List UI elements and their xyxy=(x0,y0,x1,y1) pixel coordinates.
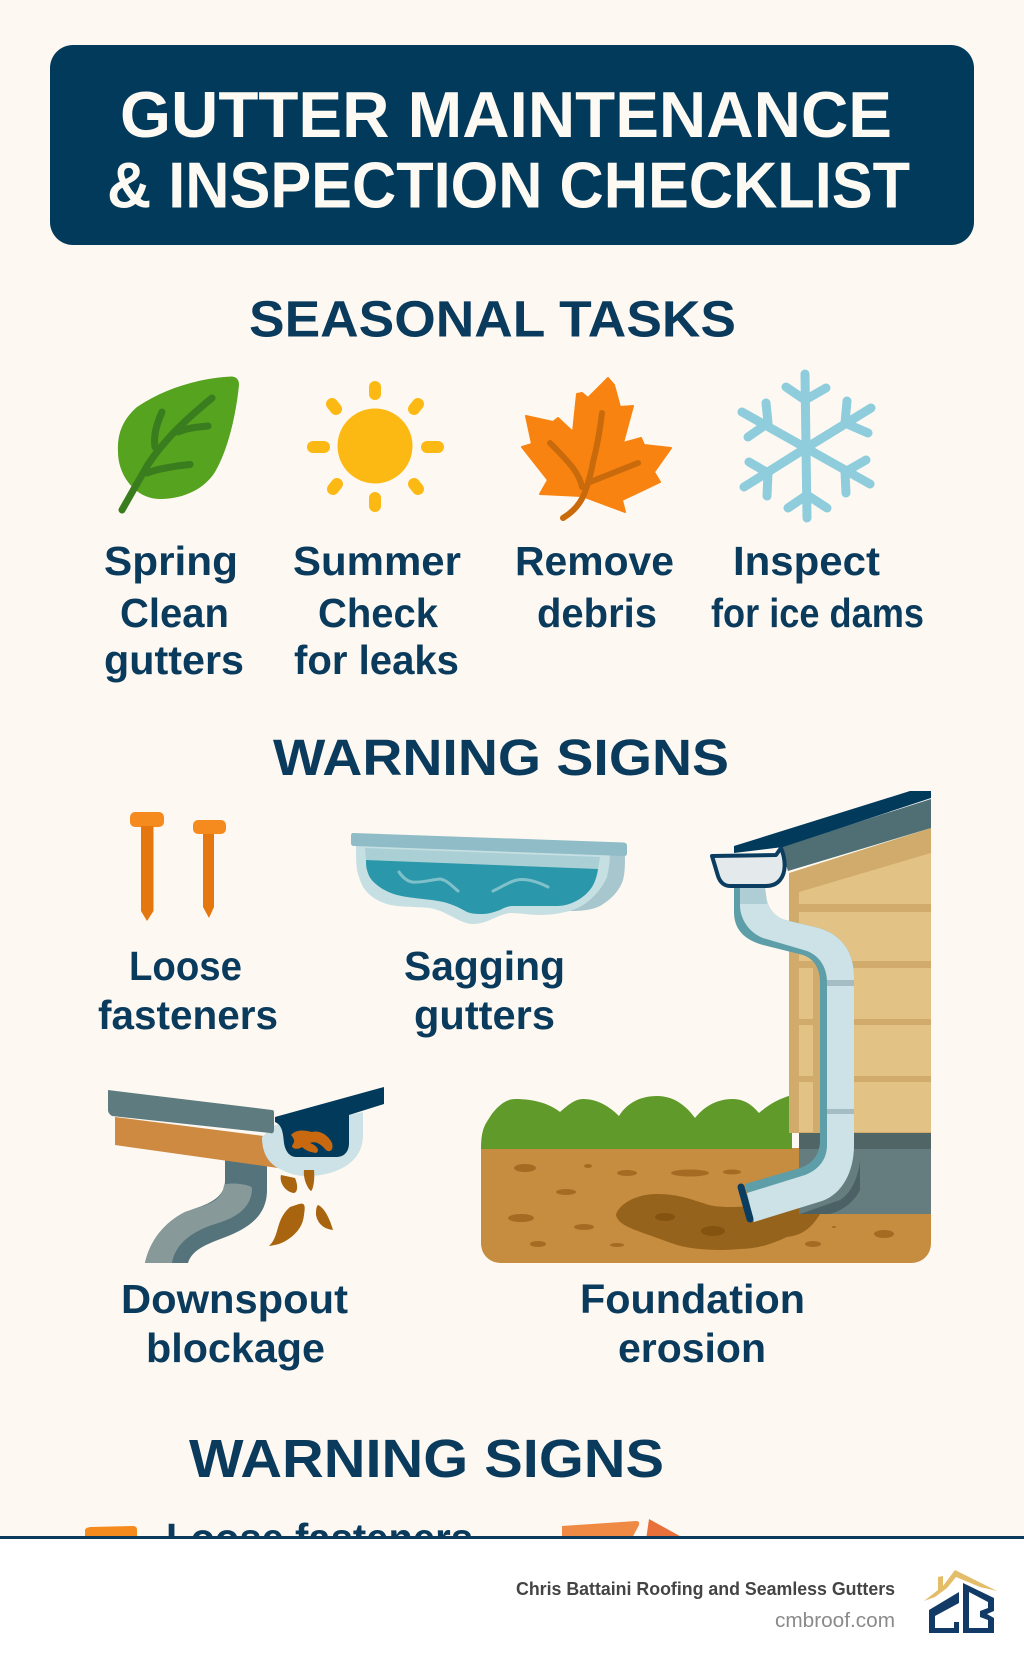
icon: green leaf xyxy=(118,376,239,510)
label: spring: Clean xyxy=(120,590,229,636)
icon: downspout blockage xyxy=(108,1087,384,1263)
label: foundation erosion: Foundation xyxy=(580,1276,805,1322)
soil xyxy=(481,1148,931,1263)
label: loose fasteners: Loose xyxy=(129,943,242,989)
label: remove debris: debris xyxy=(537,590,657,636)
label: sagging gutters: gutters xyxy=(414,992,555,1038)
label: foundation erosion: erosion xyxy=(618,1325,766,1371)
heading: seasonal tasks: SEASONAL TASKS xyxy=(249,290,736,348)
heading: warning signs: WARNING SIGNS xyxy=(273,729,729,786)
title banner: & INSPECTION CHECKLIST xyxy=(107,148,910,222)
soil spots xyxy=(508,1164,894,1247)
footer xyxy=(0,1536,1024,1666)
roof xyxy=(780,799,931,871)
icon: sun xyxy=(313,387,438,506)
label: downspout blockage: Downspout xyxy=(121,1276,348,1322)
footer website: cmbroof.com xyxy=(775,1610,895,1632)
title banner xyxy=(50,45,974,245)
pipe shadow xyxy=(800,1160,860,1214)
footer company name: Chris Battaini Roofing and Seamless Gutters xyxy=(516,1579,895,1599)
icon: foundation erosion xyxy=(481,791,931,1263)
label: summer: Check xyxy=(318,590,438,636)
label: foundation erosion xyxy=(580,1276,805,1371)
label: sagging gutters xyxy=(404,943,565,1038)
clipped list row xyxy=(85,1515,687,1561)
icon: loose nails xyxy=(130,812,226,921)
erosion patch xyxy=(616,1194,825,1250)
downspout pipe xyxy=(734,888,854,1222)
label: summer: for leaks xyxy=(294,637,459,683)
label: summer xyxy=(293,538,461,683)
label: spring: Spring xyxy=(104,538,238,584)
label: loose fasteners xyxy=(98,943,278,1038)
title banner: GUTTER MAINTENANCE xyxy=(120,78,892,151)
label: sagging gutters: Sagging xyxy=(404,943,565,989)
bushes xyxy=(481,1095,792,1149)
house siding xyxy=(789,828,931,1133)
label: spring: gutters xyxy=(104,637,244,683)
icon: maple leaf xyxy=(522,378,671,518)
clipped list row: Loose fasteners xyxy=(166,1515,473,1561)
label: remove debris: Remove xyxy=(515,538,674,584)
label: remove debris xyxy=(515,538,674,636)
label: loose fasteners: fasteners xyxy=(98,992,278,1038)
icon: sagging gutter xyxy=(351,833,627,924)
heading: repeated warning signs: WARNING SIGNS xyxy=(189,1429,664,1489)
label: downspout blockage xyxy=(121,1276,348,1371)
gutter trough xyxy=(712,848,785,886)
label: downspout blockage: blockage xyxy=(146,1325,325,1371)
house foundation xyxy=(799,1133,931,1214)
label: inspect for ice dams xyxy=(711,538,924,636)
icon: snowflake xyxy=(742,374,871,518)
label: spring xyxy=(104,538,244,683)
label: summer: Summer xyxy=(293,538,461,584)
logo xyxy=(924,1570,997,1633)
label: inspect for ice dams: for ice dams xyxy=(711,590,924,636)
label: inspect for ice dams: Inspect xyxy=(733,538,880,584)
